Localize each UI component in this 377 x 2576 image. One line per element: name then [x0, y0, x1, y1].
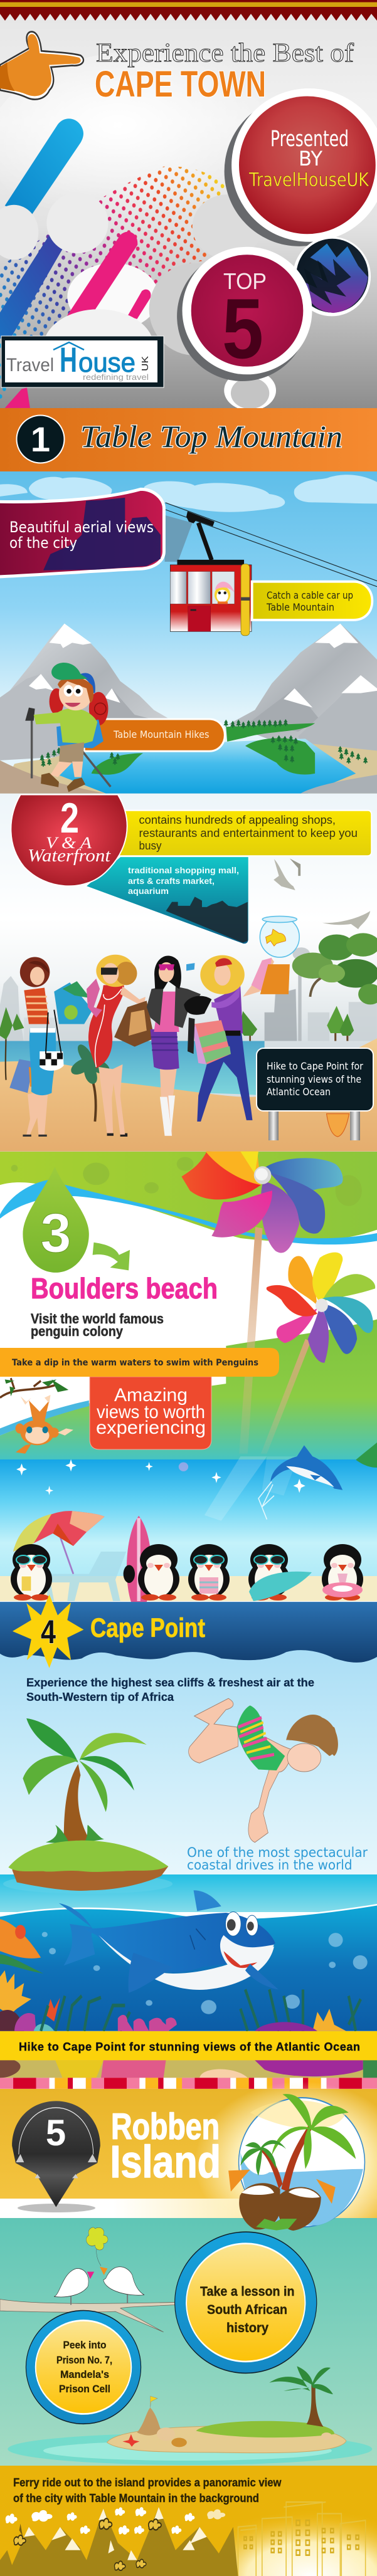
beach island	[8, 2366, 372, 2465]
banner: swim with penguins: Take a dip in the warm waters to swim with Penguins	[12, 1358, 258, 1368]
pine trees	[40, 719, 368, 767]
text: sea cliffs: Experience the highest sea cliffs & freshest air at the	[26, 1676, 314, 1689]
callout: traditional shopping mall	[85, 856, 249, 944]
icon: pointing hand	[0, 32, 83, 100]
banner glow	[194, 2081, 377, 2244]
text: sea cliffs	[26, 1676, 314, 1703]
blue ribbon	[0, 1180, 377, 1244]
callout: traditional shopping mall: aquarium	[128, 886, 169, 896]
header band	[0, 408, 377, 471]
shopper 1	[9, 957, 93, 1137]
penguin 4	[248, 1544, 312, 1601]
logo: Travel House UK: ouse	[78, 347, 135, 378]
beach umbrella	[13, 1511, 105, 1574]
badge: top 5: TOP	[223, 268, 267, 294]
callout: amazing views: views to worth	[97, 1402, 205, 1422]
city skyline left and right	[0, 947, 377, 1044]
panel: 1 Table Mountain scene	[0, 471, 377, 794]
title	[95, 39, 354, 105]
clouds	[0, 475, 377, 512]
heading: Robben Island: Robben	[111, 2106, 220, 2147]
small pinwheel	[267, 1253, 375, 1363]
sky	[0, 471, 377, 794]
badge: 2 V and A Waterfront: V & A	[46, 834, 92, 852]
sun rays and sparkles	[16, 1456, 305, 1521]
white content area and wave	[0, 1182, 377, 1459]
callout: take a lesson: Take a lesson in	[200, 2284, 295, 2299]
panel: 5 Robben Island	[0, 2078, 377, 2576]
footer text: of the city with Table Mountain in the background	[13, 2492, 259, 2505]
title: Experience the Best of	[96, 39, 354, 68]
sea	[0, 1041, 265, 1096]
callout: take a lesson	[175, 2232, 317, 2373]
mountains right	[228, 624, 377, 779]
fish bowl	[260, 916, 299, 957]
banner: swim with penguins	[0, 1348, 279, 1377]
callout: peek into prison: Mandela's	[60, 2368, 109, 2380]
badge: 2 V and A Waterfront: 2	[60, 794, 79, 842]
penguin group	[11, 1544, 363, 1601]
heading: Table Top Mountain	[80, 419, 342, 454]
map pin number 5	[12, 2101, 100, 2212]
callout: peek into prison: Prison Cell	[59, 2383, 110, 2395]
logo: Travel House UK: redefining travel	[83, 372, 149, 382]
number badge 1	[16, 415, 65, 464]
sea	[0, 1459, 377, 1579]
wave line	[0, 1905, 377, 1918]
heading: Boulders beach: Boulders beach	[31, 1272, 218, 1305]
badge: 2 V and A Waterfront: contains hundreds of appealing shops,	[139, 814, 336, 826]
badge: dark zigzag	[293, 237, 371, 316]
sticks	[239, 1227, 311, 1454]
text: coastal drives	[187, 1845, 368, 1873]
penguin 3	[188, 1544, 230, 1601]
text: penguin colony: penguin colony	[31, 1323, 124, 1339]
intro background	[0, 0, 377, 408]
text: sea cliffs: South-Western tip of Africa	[26, 1691, 174, 1703]
callout: traditional shopping mall: traditional shopping mall,	[128, 865, 239, 875]
dolphin	[258, 1445, 342, 1520]
star number 4	[13, 1594, 83, 1668]
city glow	[232, 2501, 377, 2576]
banner: hike to cape point: Hike to Cape Point for stunning views of the Atlantic Ocean	[19, 2041, 360, 2053]
sign: hike to cape point	[257, 1048, 373, 1140]
clouds white	[6, 2507, 225, 2535]
logo: Travel House UK: H	[60, 340, 77, 379]
corals	[0, 1919, 361, 2031]
branch with love birds	[0, 2227, 176, 2332]
badge: 2 V and A Waterfront: Waterfront	[28, 846, 111, 866]
shopper 3	[147, 955, 201, 1136]
arrow	[93, 1243, 130, 1270]
shark	[59, 1890, 279, 1993]
top bunting band	[0, 0, 377, 21]
callout: catch a cable car: Catch a cable car up	[267, 589, 353, 601]
city outlines	[238, 2502, 366, 2576]
text: coastal drives: coastal drives in the world	[187, 1858, 353, 1873]
small island right	[356, 1443, 377, 1468]
logo: Travel House UK	[1, 336, 164, 387]
cable and cable car	[165, 503, 377, 636]
banner: hike to cape point	[0, 2031, 377, 2061]
text: penguin colony: Visit the world famous	[31, 1311, 164, 1327]
bubbles	[42, 1932, 368, 2014]
callout: take a lesson: history	[226, 2321, 268, 2335]
big pinwheel	[181, 1152, 343, 1253]
callout: amazing views: experiencing	[96, 1417, 206, 1438]
callout: catch a cable car	[252, 582, 372, 620]
title: CAPE TOWN	[95, 64, 266, 105]
panel: 3 Boulders beach	[0, 1152, 377, 1602]
panel: 1 Table Top Mountain header	[0, 408, 377, 471]
badge: top 5: 5	[222, 281, 263, 376]
green top background	[0, 1152, 377, 1258]
badge: presented by: Presented	[270, 127, 349, 152]
mountains left	[0, 624, 168, 760]
callout: aerial views: of the city	[9, 534, 77, 552]
lower green hill and sea glow	[0, 1319, 377, 1461]
text: coastal drives: One of the most spectacular	[187, 1845, 368, 1860]
badge: presented by: BY	[299, 147, 322, 171]
badge: top 5	[177, 247, 312, 381]
number badge 1: 1	[31, 419, 50, 459]
footer text: Ferry ride out to the island provides a panoramic view	[13, 2476, 282, 2489]
sea surface	[0, 1874, 377, 1912]
callout: peek into prison: Prison No. 7,	[56, 2354, 112, 2366]
white strip	[0, 2199, 377, 2218]
callout: catch a cable car: Table Mountain	[266, 601, 334, 613]
badge: 2 V and A Waterfront: busy	[139, 839, 162, 852]
lake and shores	[0, 723, 377, 794]
monkey on a branch	[0, 1378, 73, 1454]
penguin 2	[138, 1544, 179, 1601]
panel: 4 Cape Point	[0, 1594, 377, 2078]
sign: hike to cape point: stunning views of the	[267, 1073, 361, 1085]
footer text	[13, 2476, 282, 2505]
sky background	[0, 1636, 377, 1878]
shopper 2	[87, 955, 154, 1137]
badge: presented by	[225, 88, 377, 246]
deep sea	[0, 1905, 377, 2031]
panel: 2 V and A Waterfront	[0, 794, 377, 1152]
reef strip	[0, 2060, 377, 2078]
stripe band	[0, 2078, 377, 2089]
mountains	[0, 2507, 238, 2576]
logo: Travel House UK: UK	[140, 356, 151, 371]
sign: hike to cape point: Hike to Cape Point for	[267, 1060, 363, 1072]
callout: table mountain hikes: Table Mountain Hikes	[113, 728, 210, 740]
map pin number 5: 5	[46, 2113, 66, 2153]
star number 4: 4	[41, 1614, 56, 1651]
beach chair	[47, 1552, 126, 1601]
palm island	[8, 1718, 168, 1891]
callout: amazing views	[90, 1377, 211, 1449]
soft white glow	[0, 50, 314, 238]
surfboard pink	[124, 1516, 151, 1602]
callout: aerial views: Beautiful aerial views	[9, 518, 154, 536]
surfboard	[327, 1114, 349, 1137]
header banner	[0, 1602, 377, 1663]
island reflection	[3, 1874, 173, 1894]
teal section	[0, 2218, 377, 2466]
penguin 1	[11, 1544, 52, 1601]
banner background	[0, 2089, 377, 2199]
callout: take a lesson: South African	[207, 2303, 287, 2317]
coconut palm badge	[228, 2094, 364, 2231]
heading: Robben Island: Island	[110, 2137, 221, 2187]
sand	[0, 1576, 377, 1601]
text: penguin colony	[31, 1311, 164, 1339]
number drop 3	[23, 1167, 89, 1273]
badge: 2 V and A Waterfront	[11, 794, 371, 886]
gold flower clouds on mountains	[14, 2518, 161, 2570]
sand beach	[0, 1038, 377, 1152]
number drop 3: 3	[41, 1202, 71, 1264]
seagulls	[273, 858, 370, 929]
heading: Cape Point: Cape Point	[90, 1613, 205, 1643]
leaf texture on green	[11, 1157, 362, 1206]
decorative stripes and halftone dots	[0, 118, 276, 411]
background	[0, 794, 377, 1152]
sign: hike to cape point: Atlantic Ocean	[267, 1086, 331, 1098]
logo: Travel House UK: Travel	[6, 355, 54, 376]
diver girl	[189, 1698, 338, 1843]
callout: peek into prison	[26, 2311, 141, 2424]
callout: peek into prison: Peek into	[63, 2339, 107, 2351]
penguin 5	[322, 1544, 363, 1601]
trees	[0, 933, 377, 1122]
callout: aerial views	[0, 489, 164, 577]
badge: 2 V and A Waterfront: restaurants and entertainment to keep you	[139, 827, 358, 839]
callout: table mountain hikes	[84, 719, 225, 751]
heading: Robben Island	[110, 2106, 221, 2187]
footer band	[0, 2466, 377, 2576]
hiker character	[25, 663, 110, 792]
panel: intro header	[0, 0, 377, 411]
shopper 4	[184, 955, 290, 1122]
callout: amazing views: Amazing	[114, 1385, 188, 1406]
callout: traditional shopping mall: arts & crafts market,	[128, 876, 215, 886]
